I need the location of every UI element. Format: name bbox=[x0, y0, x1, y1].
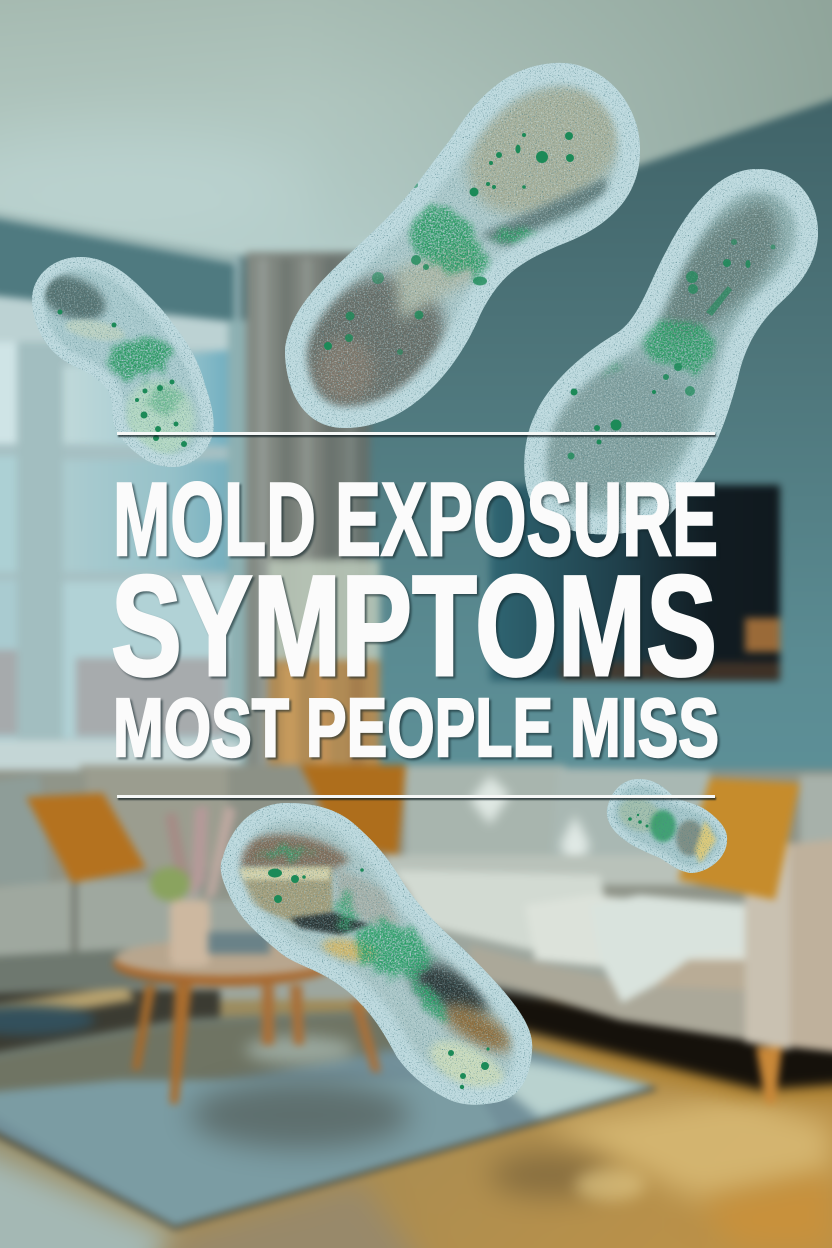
pale rim bbox=[524, 169, 818, 534]
speckle texture bbox=[607, 779, 727, 873]
green growth bbox=[650, 810, 676, 842]
cell interior tones bbox=[546, 196, 786, 498]
wall: teal back wall bbox=[230, 80, 832, 800]
sofa bbox=[0, 765, 832, 1056]
vase, flowers and books bbox=[150, 805, 270, 966]
top divider line bbox=[117, 432, 715, 435]
television bbox=[490, 485, 780, 681]
floor bbox=[0, 1000, 832, 1248]
title bbox=[111, 462, 719, 774]
cell interior tones bbox=[618, 800, 718, 864]
mold cell: top center bbox=[272, 58, 645, 443]
mold cell: right bbox=[506, 165, 822, 540]
mold cell: bottom bbox=[218, 800, 536, 1106]
green spots bbox=[324, 132, 574, 355]
bottom divider line bbox=[117, 795, 715, 798]
sofa leg bbox=[756, 1047, 782, 1104]
shadow and strip left of rug bbox=[0, 985, 220, 1060]
cell interior tones bbox=[235, 834, 518, 1106]
green spots bbox=[268, 868, 490, 1089]
pale rim bbox=[32, 257, 214, 467]
sofa base fill bbox=[0, 770, 832, 1010]
shadow under sofa bbox=[470, 985, 832, 1090]
pale rim bbox=[607, 779, 727, 873]
green spots bbox=[58, 310, 187, 447]
green growth bbox=[406, 200, 538, 286]
mold cell: small lower right bbox=[606, 779, 728, 873]
window wall and window bbox=[0, 205, 252, 775]
green growth bbox=[104, 330, 179, 418]
green spots bbox=[628, 814, 648, 828]
floor lamp bbox=[268, 560, 380, 770]
cushions bbox=[26, 765, 800, 900]
pale rim bbox=[285, 63, 640, 428]
ceiling bbox=[0, 0, 832, 258]
coffee table bbox=[113, 940, 381, 1104]
throw blanket bbox=[590, 895, 745, 1003]
green spots bbox=[568, 239, 776, 460]
rug bbox=[0, 1010, 657, 1230]
mold cell: left bbox=[25, 255, 217, 470]
speckle texture bbox=[218, 800, 536, 1106]
curtain bbox=[246, 252, 370, 772]
cell interior tones bbox=[302, 84, 620, 411]
green growth bbox=[257, 848, 455, 1027]
speckle texture bbox=[25, 255, 217, 470]
pale rim bbox=[221, 803, 532, 1105]
speckle texture bbox=[280, 58, 645, 433]
speckle texture bbox=[518, 165, 822, 540]
green growth bbox=[602, 316, 719, 380]
cell interior tones bbox=[42, 272, 194, 453]
floor light patches and shadows bbox=[0, 1030, 832, 1248]
